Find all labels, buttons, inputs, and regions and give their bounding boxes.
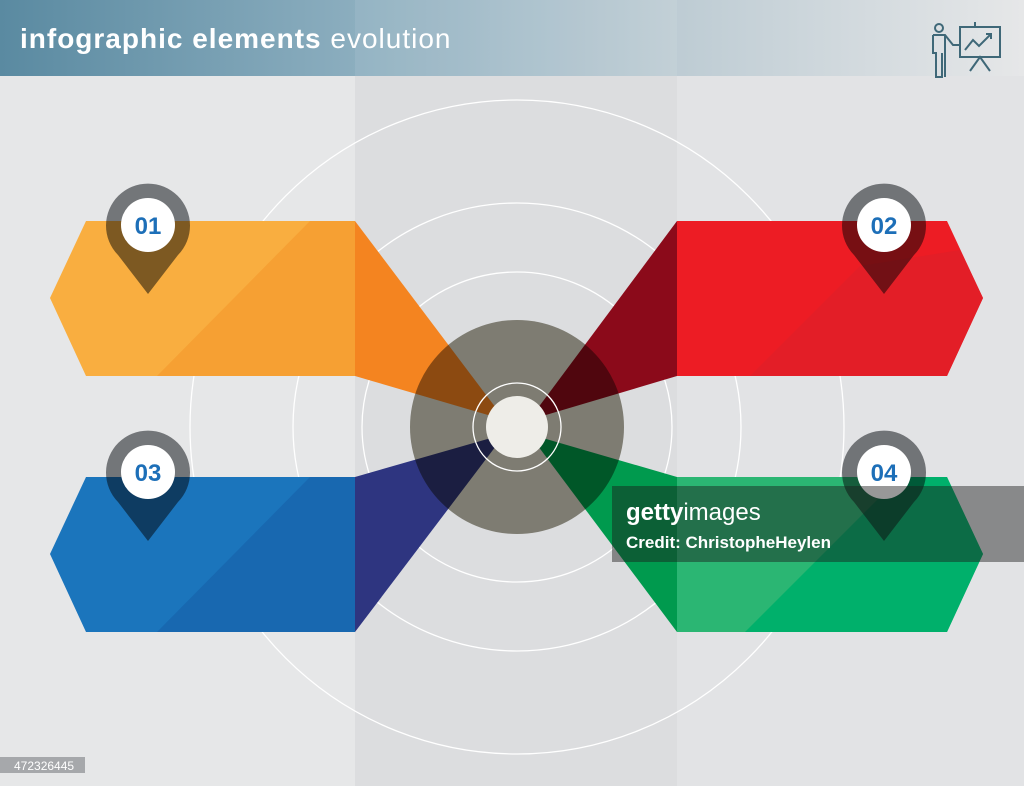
pin 01	[106, 184, 190, 294]
watermark: gettyimages	[626, 499, 761, 526]
pin 04: 04	[871, 460, 898, 487]
center disc	[410, 320, 624, 534]
pin 04	[842, 431, 926, 541]
watermark	[612, 486, 1024, 562]
icon: presenter with chart	[933, 22, 1000, 77]
pin 03	[106, 431, 190, 541]
pin 01: 01	[135, 213, 161, 240]
panel 04 green	[529, 434, 983, 632]
panel 01 orange	[50, 221, 505, 420]
pin 03: 03	[135, 460, 161, 487]
watermark: Credit: ChristopheHeylen	[626, 533, 831, 552]
pin 02	[842, 184, 926, 294]
concentric rings	[190, 100, 844, 754]
title: infographic elements evolution	[20, 23, 452, 54]
pin 02: 02	[871, 213, 897, 240]
image id: 472326445	[14, 759, 74, 773]
header bar	[0, 0, 1024, 76]
image id	[0, 757, 85, 773]
panel 02 red	[529, 221, 983, 420]
panel 03 blue	[50, 434, 505, 632]
